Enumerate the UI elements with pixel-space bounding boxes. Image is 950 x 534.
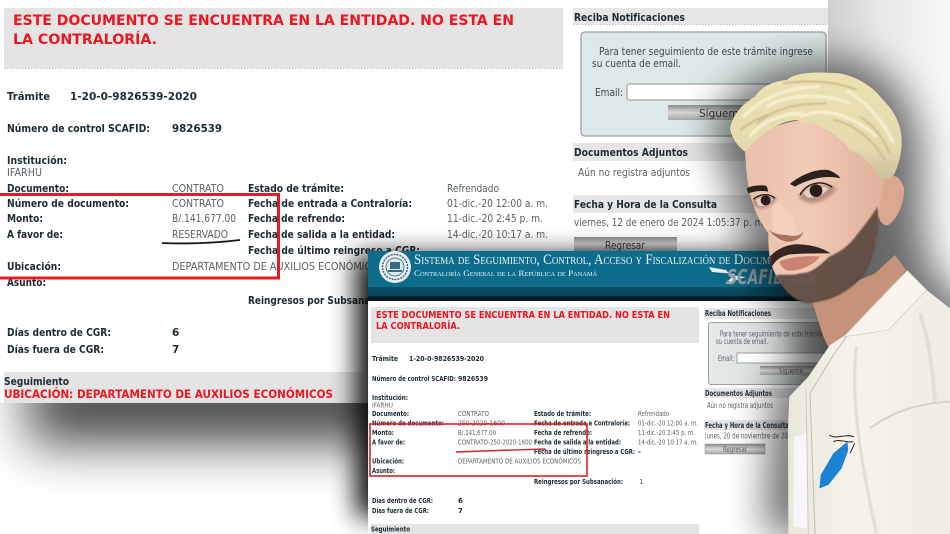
- header banner: Contraloría General de la República de Panamá: [414, 268, 598, 278]
- face: [745, 120, 885, 302]
- sidebar: notifications: Email:: [718, 354, 734, 363]
- sidebar: notifications: Para tener seguimiento de este trámite: [720, 330, 824, 338]
- tracking section: [371, 524, 699, 534]
- sidebar: query date: viernes, 12 de enero de 2024 1:05:37 p. m.: [574, 217, 766, 229]
- document details: CONTRATO: [172, 198, 224, 210]
- document details: Número de control SCAFID:: [372, 375, 456, 383]
- sidebar: notifications: [573, 8, 828, 136]
- sidebar: attachments: Aún no registra adjuntos: [578, 167, 690, 179]
- undershirt: [793, 433, 807, 528]
- document details: 01-dic.-20 12:00 a. m.: [638, 420, 698, 428]
- document details: CONTRATO: [172, 183, 224, 195]
- mustache: [770, 244, 831, 267]
- document details: Número de documento:: [372, 420, 444, 428]
- sidebar: notifications: [704, 308, 834, 384]
- alert banner: ESTE DOCUMENTO SE ENCUENTRA EN LA ENTIDAD. NO ESTA EN: [376, 310, 670, 321]
- document details: Asunto:: [372, 467, 395, 475]
- sidebar: query date: Fecha y Hora de la Consulta: [705, 421, 789, 430]
- alert banner: LA CONTRALORÍA.: [376, 320, 460, 332]
- eyebrow right: [790, 170, 841, 187]
- document details: 9826539: [458, 375, 488, 383]
- document details: DEPARTAMENTO DE AUXILIOS ECONÓMICOS: [458, 456, 581, 466]
- document details: 11-dic.-20 2:45 p. m.: [447, 213, 543, 225]
- document details: Monto:: [372, 429, 394, 437]
- document details: Asunto:: [7, 277, 46, 289]
- document details: Estado de trámite:: [248, 183, 344, 195]
- sidebar: query date: Regresar: [723, 445, 747, 454]
- document details: Refrendado: [447, 183, 499, 195]
- document details: DEPARTAMENTO DE AUXILIOS ECONÓMICOS: [172, 260, 385, 273]
- document details: [7, 91, 548, 356]
- sidebar: query date: lunes, 20 de noviembre de 2023: [705, 432, 795, 440]
- sidebar: attachments: Documentos Adjuntos: [574, 146, 688, 159]
- document details: Refrendado: [638, 410, 669, 418]
- document details: -: [638, 448, 641, 456]
- document details: Fecha de salida a la entidad:: [248, 229, 395, 241]
- sidebar: notifications: su cuenta de email.: [716, 337, 768, 346]
- document details: 9826539: [172, 123, 222, 135]
- sidebar: notifications: Para tener seguimiento de este trámite ingrese: [599, 46, 813, 58]
- sidebar: query date: [704, 420, 834, 454]
- alert banner: LA CONTRALORÍA.: [13, 31, 157, 48]
- document details: [372, 355, 698, 515]
- sidebar: notifications: Reciba Notificaciones: [705, 309, 771, 318]
- sidebar: notifications: Sigueme: [779, 366, 803, 376]
- tracking section: Seguimiento: [371, 526, 410, 534]
- document details: Fecha de último reingreso a CGR:: [534, 448, 635, 456]
- document details: Reingresos por Subsanación:: [534, 478, 623, 486]
- document details: Fecha de último reingreso a CGR:: [248, 245, 420, 257]
- logo: SCAFID: SCAFID: [727, 265, 785, 289]
- sidebar: notifications: Sígueme: [699, 108, 745, 120]
- document details: Ubicación:: [7, 261, 61, 273]
- document details: 14-dic.-20 10:17 a. m.: [638, 438, 698, 446]
- document details: 250-2020-1600: [458, 420, 505, 428]
- neck: [812, 255, 906, 352]
- document details: 1-20-0-9826539-2020: [409, 355, 484, 363]
- beard: [776, 207, 878, 303]
- document details: Institución:: [372, 394, 408, 402]
- shirt: [788, 270, 950, 534]
- document details: RESERVADO: [172, 229, 228, 241]
- document details: Estado de trámite:: [534, 410, 591, 418]
- eye left: [753, 195, 775, 206]
- alert banner: [371, 307, 699, 343]
- person shadow: [713, 60, 950, 534]
- document details: Fecha de refrendo:: [534, 429, 592, 437]
- shirt logo: blue brush: [819, 435, 855, 488]
- panel: second document: [368, 251, 838, 534]
- icon: seal of the Contraloría: [379, 251, 411, 283]
- highlight: red rectangle on second document: [370, 424, 587, 476]
- sidebar: attachments: Aún no registra adjuntos: [707, 401, 773, 410]
- tracking section: [4, 372, 364, 403]
- alert banner: [4, 8, 563, 68]
- document details: Documento:: [7, 183, 69, 195]
- sidebar: query date: Regresar: [605, 240, 646, 252]
- document details: IFARHU: [7, 167, 42, 179]
- sidebar: query date: [573, 195, 828, 252]
- sidebar: notifications: Email:: [595, 87, 623, 99]
- tracking section: UBICACIÓN: DEPARTAMENTO DE AUXILIOS ECONÓMICOS: [4, 386, 333, 401]
- document details: Documento:: [372, 410, 409, 418]
- underline: reservado: [162, 240, 240, 243]
- document details: Fecha de salida a la entidad:: [534, 438, 621, 446]
- document details: Ubicación:: [372, 458, 404, 466]
- document details: 14-dic.-20 10:17 a. m.: [447, 229, 548, 241]
- soul patch: [788, 273, 815, 285]
- lips: [779, 256, 820, 271]
- panel: main document: [0, 0, 828, 403]
- tracking section: Seguimiento: [4, 375, 69, 388]
- nose highlight: [772, 202, 796, 241]
- eye right: [800, 183, 832, 197]
- underline: red strike: [456, 449, 545, 452]
- header banner: [368, 251, 830, 301]
- document details: Número de control SCAFID:: [7, 123, 150, 135]
- document details: IFARHU: [372, 402, 393, 410]
- highlight: red rectangle on main document: [0, 194, 278, 278]
- alert banner: ESTE DOCUMENTO SE ENCUENTRA EN LA ENTIDAD. NO ESTA EN: [13, 13, 514, 29]
- document details: 11-dic.-20 2:45 p. m.: [638, 429, 695, 437]
- document details: 1-20-0-9826539-2020: [70, 91, 197, 103]
- sidebar: attachments: [704, 388, 834, 410]
- document details: B/.141,677.00: [458, 429, 496, 437]
- person: [713, 60, 950, 534]
- document details: 01-dic.-20 12:00 a. m.: [447, 198, 548, 210]
- document details: 7: [172, 344, 179, 356]
- document details: B/.141,677.00: [172, 213, 236, 225]
- document details: Número de documento:: [7, 198, 129, 210]
- document details: Monto:: [7, 213, 43, 225]
- document details: Institución:: [7, 155, 67, 167]
- document details: A favor de:: [372, 438, 405, 446]
- document details: Días dentro de CGR:: [372, 497, 433, 505]
- ear: [878, 175, 904, 225]
- document details: Días fuera de CGR:: [7, 344, 104, 356]
- document details: CONTRATO-250-2020-1600: [458, 438, 532, 446]
- header banner: Sistema de Seguimiento, Control, Acceso y Fiscalización de Documentos: [414, 252, 799, 268]
- sidebar: notifications: su cuenta de email.: [592, 58, 681, 70]
- document details: Fecha de entrada a Contraloría:: [534, 420, 630, 428]
- document details: 6: [458, 497, 463, 505]
- document details: CONTRATO: [458, 410, 489, 418]
- document details: Fecha de entrada a Contraloría:: [248, 198, 412, 210]
- document details: Días fuera de CGR:: [372, 507, 429, 515]
- document details: Reingresos por Subsanación:: [248, 295, 395, 307]
- under-eye shadows: [752, 186, 837, 208]
- document details: A favor de:: [7, 229, 63, 241]
- document details: Trámite: [7, 91, 50, 103]
- logo: SCAFID: [709, 265, 785, 289]
- sidebar: notifications: Reciba Notificaciones: [574, 11, 685, 24]
- document details: Trámite: [372, 355, 398, 363]
- shadow of second document: [356, 255, 842, 517]
- sidebar: attachments: Documentos Adjuntos: [705, 389, 772, 398]
- eyebrow left: [747, 185, 768, 193]
- document details: 7: [458, 507, 463, 515]
- sidebar: query date: Fecha y Hora de la Consulta: [574, 198, 717, 211]
- document details: Días dentro de CGR:: [7, 327, 111, 339]
- document details: 1: [639, 478, 643, 486]
- hair: [730, 72, 902, 180]
- nose: [768, 230, 803, 242]
- sidebar: attachments: [573, 143, 828, 179]
- document details: Fecha de refrendo:: [248, 213, 345, 225]
- document details: 6: [172, 327, 179, 339]
